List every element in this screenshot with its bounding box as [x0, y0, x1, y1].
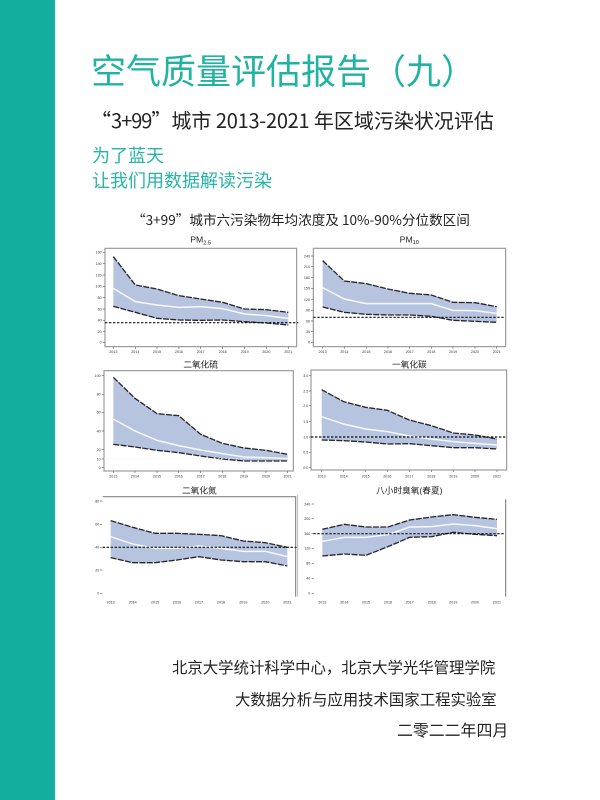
chart: PM2.5: 0: [100, 341, 102, 345]
chart: PM10: 2017: [406, 350, 414, 354]
chart: 二氧化硫: 20: [97, 448, 101, 452]
chart: 八小时臭氧(春夏): 2017: [406, 600, 414, 604]
chart: 二氧化硫: 10: [97, 457, 101, 461]
chart: 一氧化碳: 2015: [362, 475, 370, 479]
chart: 二氧化硫: [95, 358, 293, 479]
chart: PM2.5: 2019: [241, 350, 249, 354]
chart: 一氧化碳: 2014: [340, 475, 348, 479]
chart: 二氧化氮: 2019: [239, 600, 247, 604]
chart: PM10: 2020: [471, 350, 479, 354]
title: 空气质量评估报告（九）: [91, 53, 476, 92]
chart: 二氧化氮: [95, 484, 297, 604]
chart: 二氧化氮: 2018: [217, 600, 225, 604]
chart: 二氧化氮: 2014: [129, 600, 137, 604]
chart: PM10: 2013: [319, 350, 327, 354]
chart: 二氧化硫: 2019: [240, 475, 248, 479]
subtitle: “3+99”城市 2013-2021 年区域污染状况评估: [91, 105, 494, 134]
chart: 二氧化氮: 2021: [283, 600, 291, 604]
chart: 八小时臭氧(春夏): 120: [304, 547, 310, 551]
chart: PM2.5: 2018: [219, 350, 227, 354]
chart: PM2.5: 2021: [284, 350, 292, 354]
chart: PM10: 150: [304, 287, 310, 291]
chart section title: “3+99”城市六污染物年均浓度及 10%-90%分位数区间: [132, 209, 470, 229]
chart: 一氧化碳: 3.0: [303, 374, 308, 378]
chart: PM2.5: 2016: [175, 350, 183, 354]
chart: PM2.5: 20: [98, 330, 102, 334]
chart: PM2.5: 2017: [197, 350, 205, 354]
chart: 二氧化氮: 2013: [107, 600, 115, 604]
chart: 一氧化碳: 2019: [449, 475, 457, 479]
chart: 二氧化硫: 60: [97, 411, 101, 415]
chart: 八小时臭氧(春夏): 2014: [340, 600, 348, 604]
chart: PM2.5: 2015: [153, 350, 161, 354]
chart: 八小时臭氧(春夏): 2019: [449, 600, 457, 604]
chart: 二氧化氮: 2017: [195, 600, 203, 604]
chart: PM10: 2019: [449, 350, 457, 354]
chart: PM10: 180: [304, 276, 310, 280]
footer: institution line 2: 大数据分析与应用技术国家工程实验室: [235, 692, 497, 709]
chart: 二氧化硫: 2015: [153, 475, 161, 479]
chart: PM2.5: 100: [96, 285, 102, 289]
chart: 八小时臭氧(春夏): 八小时臭氧(春夏): [376, 484, 443, 495]
chart: 八小时臭氧(春夏): 0: [308, 592, 310, 596]
chart: 二氧化硫: 2018: [218, 475, 226, 479]
chart: 二氧化硫: 0: [99, 466, 101, 470]
chart: PM2.5: [96, 235, 298, 354]
chart: 八小时臭氧(春夏): 2018: [428, 600, 436, 604]
slogan: 为了蓝天: [92, 146, 164, 166]
slogan: 让我们用数据解读污染: [92, 170, 272, 190]
chart: 一氧化碳: 0.5: [303, 451, 308, 455]
chart: 八小时臭氧(春夏): 160: [304, 532, 310, 536]
chart: 八小时臭氧(春夏): 80: [306, 562, 310, 566]
chart: PM10: 2014: [340, 350, 348, 354]
chart: PM10: 0: [308, 341, 310, 345]
chart: PM10: 60: [306, 319, 310, 323]
chart: PM10: 2016: [384, 350, 392, 354]
chart: 二氧化氮: 20: [95, 568, 99, 572]
chart: PM2.5: 2.5: [203, 240, 211, 246]
chart: 一氧化碳: 2018: [427, 475, 435, 479]
chart: 八小时臭氧(春夏): [298, 484, 506, 604]
chart: 一氧化碳: 1.0: [303, 435, 308, 439]
chart: PM10: PM: [400, 234, 413, 244]
chart: PM10: 30: [306, 330, 310, 334]
chart: 二氧化硫: 2014: [131, 475, 139, 479]
chart: 二氧化硫: 2013: [109, 475, 117, 479]
teal sidebar: [0, 0, 55, 800]
chart: 二氧化硫: 40: [97, 429, 101, 433]
chart: PM2.5: 2013: [109, 350, 117, 354]
chart: 八小时臭氧(春夏): 40: [306, 577, 310, 581]
chart: PM2.5: 40: [98, 319, 102, 323]
chart: 二氧化氮: 0: [97, 592, 99, 596]
chart: PM2.5: 120: [96, 273, 102, 277]
chart: 二氧化硫: 二氧化硫: [183, 358, 218, 369]
chart: 八小时臭氧(春夏): 2021: [493, 600, 501, 604]
chart: 八小时臭氧(春夏): 200: [304, 517, 310, 521]
chart: PM10: 2018: [427, 350, 435, 354]
chart: PM10: 120: [304, 298, 310, 302]
chart: 二氧化硫: 80: [97, 393, 101, 397]
chart: 二氧化硫: 100: [95, 374, 101, 378]
chart: 二氧化氮: 二氧化氮: [182, 484, 217, 495]
chart: 一氧化碳: [303, 358, 507, 479]
chart: PM2.5: 80: [98, 296, 102, 300]
chart: 一氧化碳: 2.5: [303, 389, 308, 393]
chart: 一氧化碳: 2.0: [303, 404, 308, 408]
chart: 二氧化硫: 2020: [262, 475, 270, 479]
chart: PM2.5: 160: [96, 251, 102, 255]
chart: 二氧化氮: 60: [95, 523, 99, 527]
footer: institution line 1: 北京大学统计科学中心，北京大学光华管理学院: [172, 660, 495, 677]
chart: PM10: 2021: [493, 350, 501, 354]
chart: 一氧化碳: 2013: [318, 475, 326, 479]
chart: 八小时臭氧(春夏): 2016: [384, 600, 392, 604]
slogan: [92, 146, 272, 190]
chart: 八小时臭氧(春夏): 2020: [471, 600, 479, 604]
chart: 一氧化碳: 1.5: [303, 420, 308, 424]
chart: 二氧化氮: 80: [95, 499, 99, 503]
chart: 二氧化硫: 2016: [175, 475, 183, 479]
chart: 一氧化碳: 2021: [493, 475, 501, 479]
chart: PM10: 90: [306, 309, 310, 313]
chart: 一氧化碳: 0.0: [303, 466, 308, 470]
chart: PM2.5: 2014: [131, 350, 139, 354]
chart: 二氧化氮: 2020: [261, 600, 269, 604]
chart: PM2.5: PM: [190, 235, 203, 245]
chart: 二氧化氮: 2015: [151, 600, 159, 604]
chart: 二氧化氮: 40: [95, 546, 99, 550]
chart: PM2.5: 2020: [262, 350, 270, 354]
footer: date: 二零二二年四月: [397, 723, 508, 740]
chart: PM10: 10: [413, 240, 419, 246]
chart: PM2.5: 60: [98, 307, 102, 311]
chart: 二氧化氮: 2016: [173, 600, 181, 604]
chart: 一氧化碳: 2020: [471, 475, 479, 479]
chart: 一氧化碳: 2016: [383, 475, 391, 479]
chart: PM10: 2015: [362, 350, 370, 354]
chart: 二氧化硫: 2021: [284, 475, 292, 479]
chart: 八小时臭氧(春夏): 2013: [318, 600, 326, 604]
chart: 一氧化碳: 2017: [405, 475, 413, 479]
chart: 二氧化硫: 2017: [197, 475, 205, 479]
chart: 八小时臭氧(春夏): 240: [304, 502, 310, 506]
chart: PM10: [304, 234, 506, 354]
chart: PM10: 210: [304, 265, 310, 269]
chart: PM2.5: 140: [96, 262, 102, 266]
chart: PM10: 240: [304, 254, 310, 258]
chart: 一氧化碳: 一氧化碳: [392, 358, 427, 369]
chart: 八小时臭氧(春夏): 2015: [362, 600, 370, 604]
